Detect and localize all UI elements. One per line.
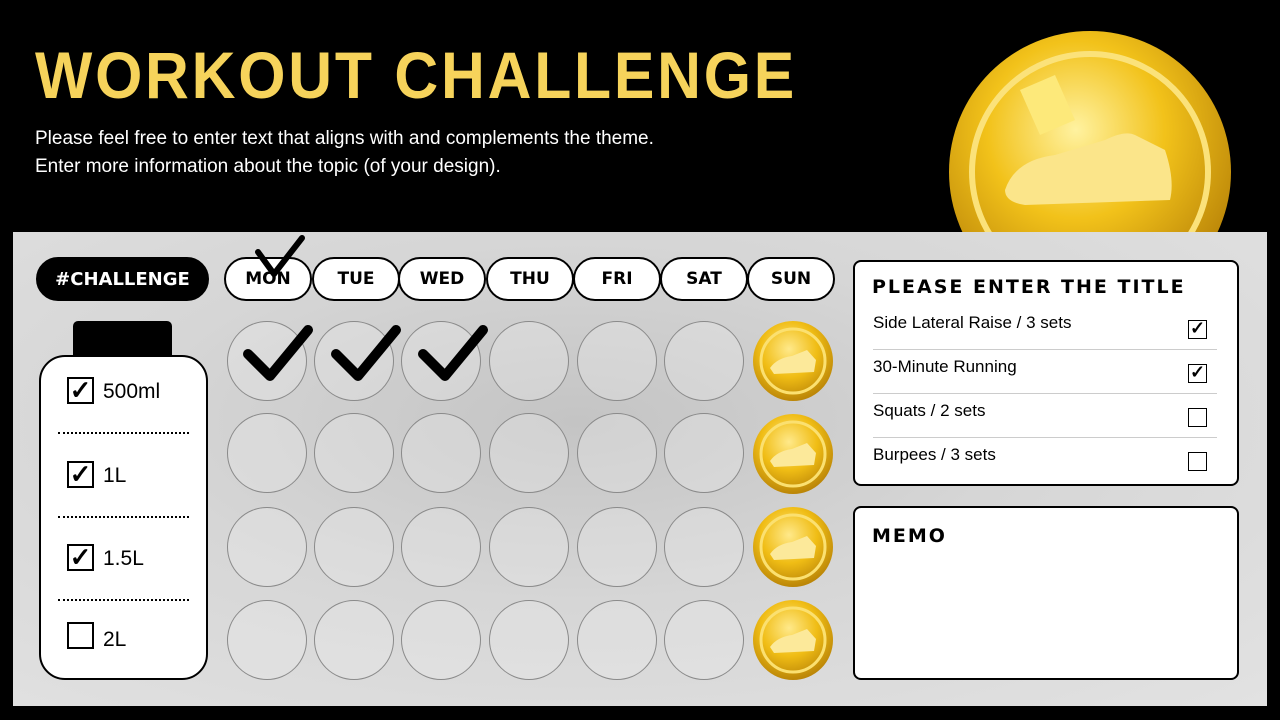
- panel: water bottle checklist: 2L: [103, 628, 126, 651]
- panel: exercise checklist: 30-Minute Running: [873, 357, 1017, 376]
- label: #challenge: [36, 257, 209, 301]
- panel: water bottle checklist: ✓: [70, 542, 91, 572]
- panel: water bottle checklist: ✓: [70, 459, 91, 489]
- day headers: SUN: [771, 269, 811, 289]
- icon: big gold coin: [949, 31, 1231, 232]
- icons: checkmarks row 1: [243, 325, 488, 381]
- panel: water bottle checklist: 1.5L: [103, 547, 144, 570]
- label: #challenge: #CHALLENGE: [55, 268, 190, 290]
- panel: water bottle checklist: 500ml: [103, 380, 160, 403]
- day headers: FRI: [601, 269, 633, 289]
- panel: exercise checklist: PLEASE ENTER THE TITLE: [872, 276, 1186, 298]
- panel: memo: MEMO: [872, 525, 947, 547]
- panel: exercise checklist: Side Lateral Raise / 3 sets: [873, 313, 1071, 332]
- day headers: [224, 257, 835, 301]
- panel: water bottle checklist: [39, 355, 208, 680]
- subtitle: [35, 128, 654, 177]
- panel: exercise checklist: [853, 260, 1239, 486]
- subtitle: Please feel free to enter text that aligns with and complements the theme.: [35, 128, 654, 149]
- day headers: SAT: [686, 269, 722, 289]
- day headers: MON: [245, 269, 291, 289]
- icon: check over MON: [255, 235, 305, 276]
- grid of day circles: [227, 321, 744, 680]
- panel: water bottle checklist: ✓: [70, 375, 91, 405]
- day headers: TUE: [337, 269, 374, 289]
- day headers: THU: [510, 269, 550, 289]
- panel: exercise checklist: Squats / 2 sets: [873, 401, 985, 420]
- panel: exercise checklist: ✓: [1190, 318, 1205, 338]
- icons: sunday gold coins: [753, 321, 833, 680]
- subtitle: Enter more information about the topic (of your design).: [35, 156, 501, 177]
- panel: exercise checklist: ✓: [1190, 362, 1205, 382]
- panel: background board: [13, 232, 1267, 706]
- title: WORKOUT CHALLENGE: [35, 38, 797, 112]
- panel: exercise checklist: Burpees / 3 sets: [873, 445, 996, 464]
- day headers: WED: [420, 269, 464, 289]
- panel: water bottle checklist: 1L: [103, 464, 126, 487]
- panel: memo: [853, 506, 1239, 680]
- icon: water bottle cap: [73, 321, 172, 357]
